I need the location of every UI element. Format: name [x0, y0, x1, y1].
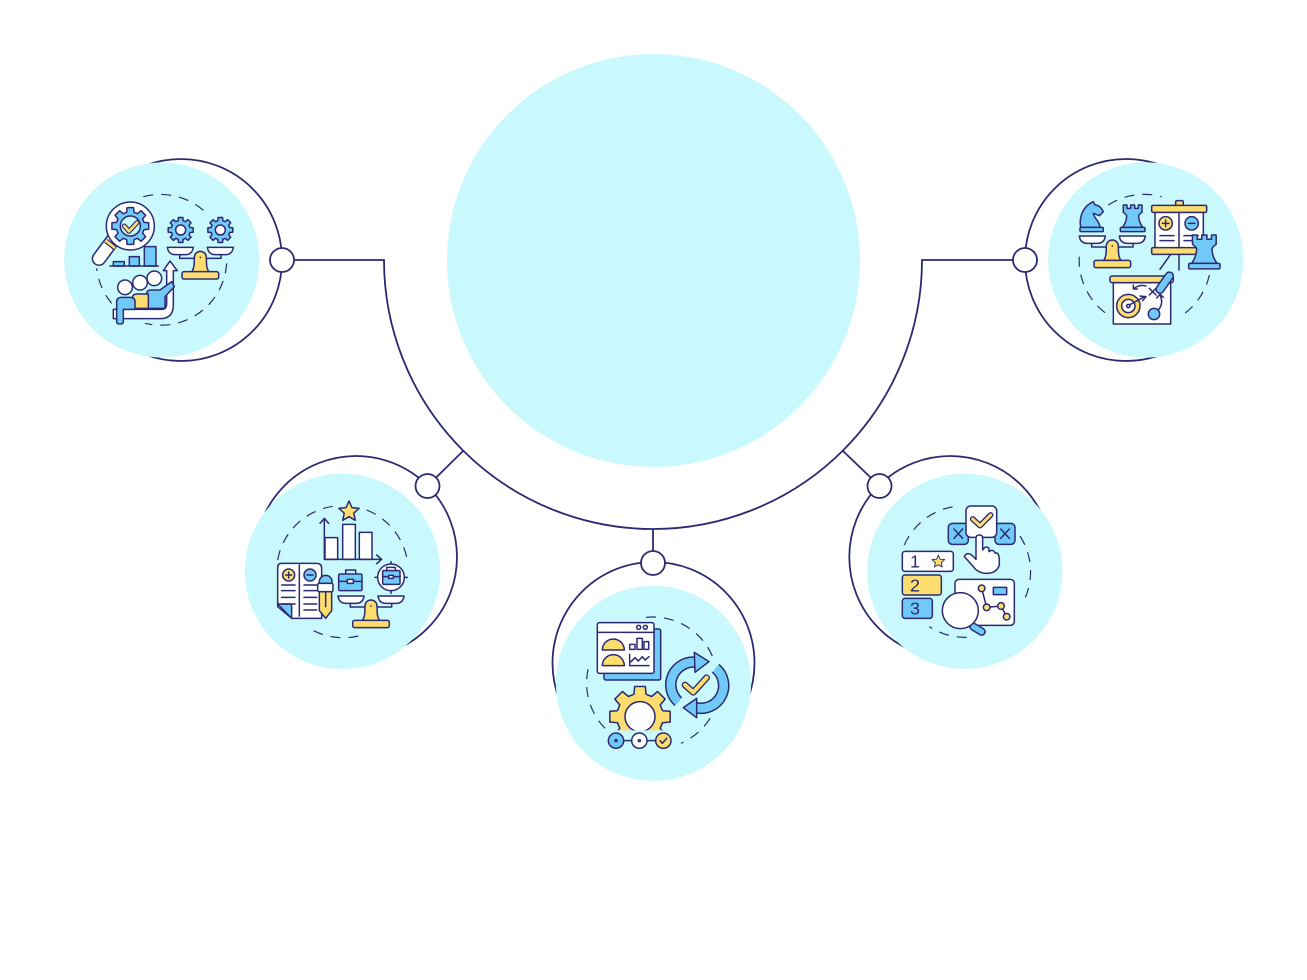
- icon: comparing and choosing a career: [278, 501, 408, 638]
- icon: ranking, selection and analysis: 2: [910, 575, 920, 595]
- icon: quality, balance and team growth: [97, 194, 233, 325]
- icon: ranking, selection and analysis: 1: [910, 552, 920, 572]
- icon: dashboard, refresh and process gear: [587, 617, 724, 754]
- central circle: [447, 54, 860, 467]
- panel: top right: [1013, 159, 1243, 361]
- connector lines: [294, 260, 1013, 551]
- icon: strategy chess and planning board: [1079, 194, 1220, 324]
- icon: ranking, selection and analysis: [902, 506, 1031, 637]
- icon: ranking, selection and analysis: 3: [910, 599, 920, 619]
- panel: lower left: [245, 456, 457, 669]
- panel: top left: [64, 159, 294, 361]
- panel: bottom center: [552, 551, 754, 781]
- panel: lower right: [849, 456, 1062, 669]
